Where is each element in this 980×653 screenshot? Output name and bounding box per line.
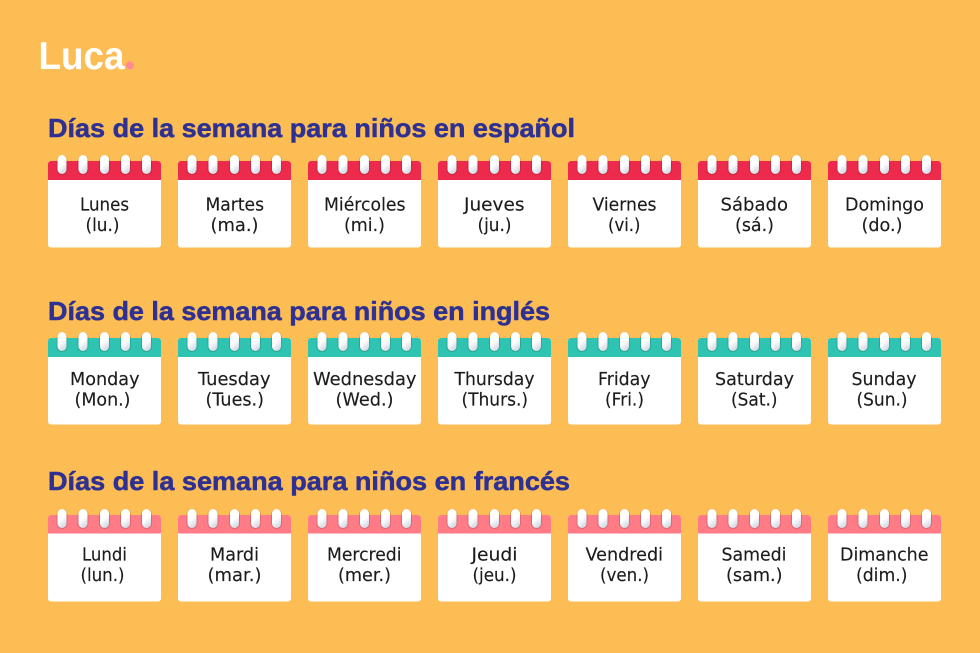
calendar: Jeudi: (jeu.): [472, 565, 516, 586]
calendar: Sunday: (Sun.): [856, 390, 908, 410]
calendar: Samedi: (sam.): [726, 565, 782, 586]
calendar: Tuesday: (Tues.): [206, 390, 264, 410]
calendar: Thursday: Thursday: [454, 369, 535, 390]
calendar: Jeudi: Jeudi: [470, 544, 518, 566]
calendar: Vendredi: (ven.): [600, 565, 649, 586]
row: calendarios en español: [48, 155, 941, 248]
calendar: Tuesday: Tuesday: [197, 369, 271, 390]
calendar: Martes: [178, 155, 291, 248]
calendar: Jueves: [438, 155, 551, 248]
calendar: Viernes: (vi.): [608, 215, 640, 236]
calendar: Miércoles: [308, 155, 421, 248]
calendar: Jueves: Jueves: [463, 194, 524, 216]
calendar: Thursday: [438, 332, 551, 424]
calendar: Monday: Monday: [70, 369, 140, 390]
calendar: Domingo: (do.): [862, 215, 902, 236]
row: calendarios en francés: [48, 509, 941, 602]
calendar: Monday: (Mon.): [74, 390, 130, 410]
heading: español: Días de la semana para niños en español: [48, 113, 575, 143]
calendar: Lunes: Lunes: [80, 194, 129, 216]
calendar: Sunday: Sunday: [852, 369, 917, 390]
calendar: Miércoles: Miércoles: [324, 194, 406, 216]
calendar: Sábado: [698, 155, 811, 248]
calendar: Lunes: (lu.): [86, 215, 120, 236]
calendar: Saturday: [698, 332, 811, 424]
calendar: Mercredi: [308, 509, 421, 602]
calendar: Wednesday: [308, 332, 421, 424]
calendar: Domingo: Domingo: [845, 194, 924, 216]
calendar: Samedi: [698, 509, 811, 602]
calendar: Tuesday: [178, 332, 291, 424]
calendar: Mardi: (mar.): [208, 565, 262, 586]
calendar: Mardi: Mardi: [210, 544, 259, 566]
logo: Luca: Luca: [38, 35, 125, 78]
calendar: Dimanche: (dim.): [856, 565, 908, 586]
calendar: Sábado: (sá.): [735, 215, 774, 236]
calendar: Miércoles: (mi.): [344, 215, 385, 236]
calendar: Dimanche: Dimanche: [840, 544, 928, 566]
calendar: Saturday: Saturday: [715, 369, 794, 390]
calendar: Mercredi: (mer.): [338, 565, 391, 586]
calendar: Vendredi: [568, 509, 681, 602]
calendar: Mardi: [178, 509, 291, 602]
calendar: Friday: Friday: [598, 369, 651, 390]
calendar: Lundi: [48, 509, 161, 602]
calendar: Vendredi: Vendredi: [586, 544, 663, 566]
calendar: Thursday: (Thurs.): [462, 390, 528, 410]
row: calendarios en inglés: [48, 332, 941, 424]
calendar: Martes: (ma.): [210, 215, 258, 236]
calendar: Wednesday: (Wed.): [336, 390, 394, 410]
calendar: Samedi: Samedi: [722, 544, 786, 566]
calendar: Mercredi: Mercredi: [327, 544, 402, 566]
calendar: Friday: (Fri.): [605, 390, 644, 410]
calendar: Lundi: Lundi: [82, 544, 127, 566]
calendar: Saturday: (Sat.): [731, 390, 778, 410]
calendar: Domingo: [828, 155, 941, 248]
heading: francés: Días de la semana para niños en francés: [48, 466, 570, 496]
calendar: Wednesday: Wednesday: [313, 369, 417, 390]
calendar: Lunes: [48, 155, 161, 248]
calendar: Viernes: [568, 155, 681, 248]
heading: inglés: Días de la semana para niños en inglés: [48, 296, 550, 326]
calendar: Friday: [568, 332, 681, 424]
calendar: Jueves: (ju.): [478, 215, 512, 236]
calendar: Viernes: Viernes: [592, 194, 656, 216]
calendar: Sunday: [828, 332, 941, 424]
calendar: Lundi: (lun.): [80, 565, 124, 586]
calendar: Sábado: Sábado: [720, 194, 788, 216]
calendar: Monday: [48, 332, 161, 424]
calendar: Dimanche: [828, 509, 941, 602]
calendar: Martes: Martes: [206, 194, 264, 216]
calendar: Jeudi: [438, 509, 551, 602]
